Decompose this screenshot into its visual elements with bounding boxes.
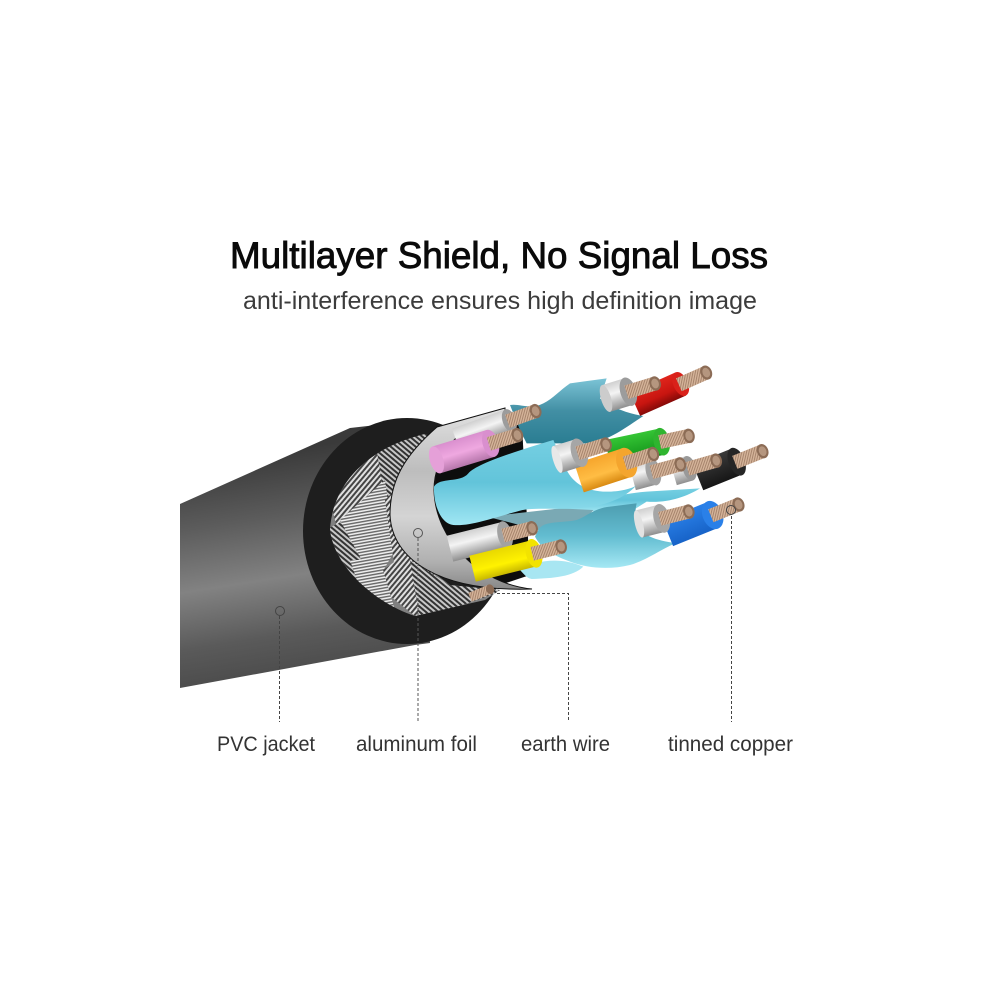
label: aluminum foil: aluminum foil (356, 733, 477, 756)
grey wire right, rear (670, 447, 725, 485)
callout line: PVC jacket (276, 606, 284, 722)
cable illustration (180, 359, 773, 688)
wire shadow inside the cable (435, 410, 530, 585)
callout line: earth wire (497, 594, 568, 720)
white wire lower left (447, 513, 541, 562)
black wire (693, 435, 773, 491)
green wire (605, 421, 698, 467)
blue wire (662, 489, 749, 547)
aluminum foil sleeve (390, 408, 532, 589)
silver ribbon between teal bundles (487, 508, 593, 530)
PVC jacket (180, 420, 430, 688)
label: earth wire: earth wire (521, 733, 610, 756)
red wire (630, 359, 717, 416)
title: Multilayer Shield, No Signal Loss (230, 235, 768, 276)
lower teal foil bundle (535, 503, 675, 568)
braided shield (330, 434, 500, 616)
white wire centre (549, 429, 616, 475)
teal foil, bottom (520, 561, 583, 579)
earth wire (468, 583, 496, 602)
subtitle: anti-interference ensures high definition image (243, 287, 757, 315)
silver wire top (597, 368, 665, 414)
wires drawn in the coordinates of a 3x grid (426, 359, 773, 602)
teal right bundle behind grey wires (560, 488, 700, 512)
label: PVC jacket: PVC jacket (217, 733, 315, 756)
orange wire (574, 438, 663, 493)
white wire lower right (632, 496, 698, 539)
large light teal foil bundle (434, 440, 637, 525)
label: tinned copper: tinned copper (668, 733, 793, 756)
black jacket end cap (303, 418, 511, 644)
grey wire behind pink (452, 398, 545, 451)
yellow wire (469, 531, 570, 583)
callout line: aluminum foil (414, 528, 422, 722)
grey wire right, front (629, 449, 689, 491)
callout line: tinned copper (726, 506, 736, 722)
pink wire (426, 420, 527, 475)
white opening behind the wires (436, 405, 628, 575)
upper teal foil bundle (510, 378, 643, 443)
